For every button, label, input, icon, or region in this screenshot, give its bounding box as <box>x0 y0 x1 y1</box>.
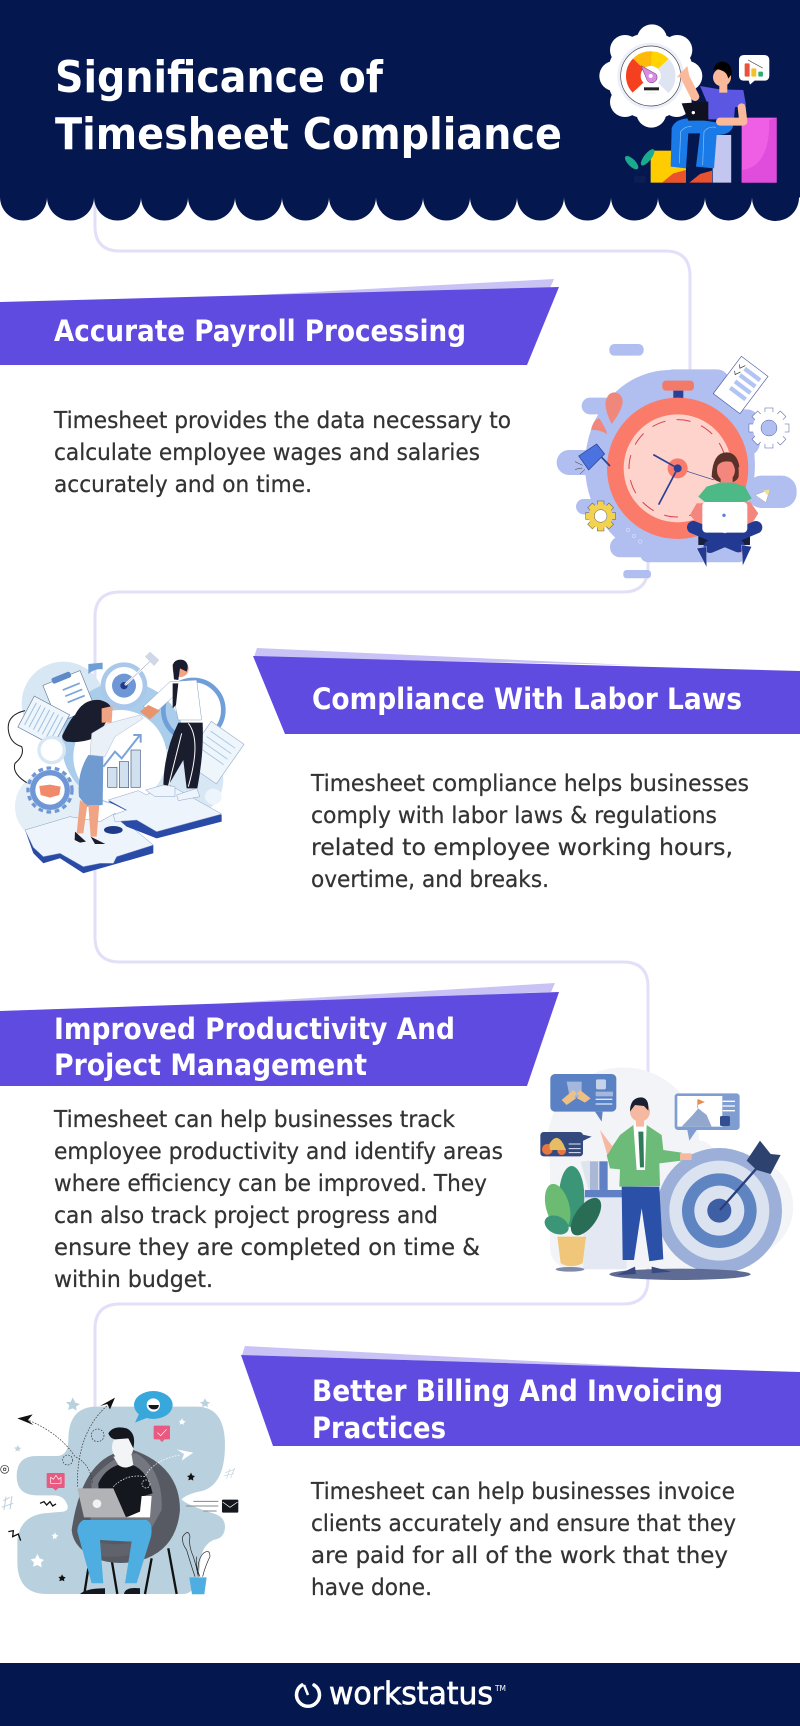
gauge dial <box>617 43 684 109</box>
text: labor laws paragraph: related to employee working hours, <box>311 833 733 861</box>
text: billing paragraph: clients accurately and ensure that they <box>311 1509 736 1537</box>
chart bubble <box>739 55 769 85</box>
illustration: man with target <box>540 1067 793 1280</box>
title: Significance of <box>55 52 384 103</box>
shadow <box>609 1269 751 1280</box>
text: productivity paragraph: Timesheet can help businesses track <box>53 1105 455 1133</box>
banner: billing <box>241 1346 800 1446</box>
plant <box>540 1166 607 1272</box>
puzzle pieces <box>25 783 222 873</box>
banner: labor laws <box>253 648 800 734</box>
text: billing paragraph: have done. <box>311 1573 432 1601</box>
text: payroll paragraph: Timesheet provides the data necessary to <box>53 406 511 434</box>
text: labor laws paragraph: overtime, and breaks. <box>311 865 549 893</box>
banner: productivity <box>0 983 559 1086</box>
heading: Better Billing And Invoicing <box>312 1374 723 1408</box>
stars and marks <box>1 1397 235 1581</box>
plant <box>182 1532 210 1594</box>
chair <box>72 1450 180 1594</box>
icons: red tags <box>47 1426 170 1491</box>
connector path <box>95 200 690 1410</box>
icon: megaphone <box>575 444 610 474</box>
icon: white gear <box>599 24 702 128</box>
bubble: mountain <box>675 1093 740 1141</box>
banner: billing: Practices <box>312 1411 446 1445</box>
text: labor laws paragraph: Timesheet compliance helps businesses <box>310 769 749 797</box>
text: productivity paragraph: ensure they are completed on time & <box>54 1233 480 1261</box>
illustration: man on laptop in chair <box>1 1391 238 1594</box>
bubble: money <box>540 1132 592 1156</box>
text: productivity paragraph <box>53 1105 503 1293</box>
text: billing paragraph <box>310 1477 736 1601</box>
man <box>600 1097 692 1275</box>
background blob <box>547 1067 793 1268</box>
text: productivity paragraph: employee productivity and identify areas <box>54 1137 503 1165</box>
footer band <box>0 1663 800 1726</box>
text: payroll paragraph: calculate employee wages and salaries <box>54 438 480 466</box>
heading: Compliance With Labor Laws <box>312 682 742 716</box>
text: productivity paragraph: where efficiency can be improved. They <box>54 1169 487 1197</box>
icon: yellow gear <box>586 501 616 531</box>
icon: envelope <box>186 1500 238 1513</box>
banner: accurate payroll <box>0 279 559 365</box>
icon: paper plane <box>755 489 770 503</box>
gears and wire <box>8 711 72 812</box>
text: payroll paragraph: accurately and on time. <box>54 470 312 498</box>
documents <box>18 663 244 784</box>
header band <box>0 0 800 221</box>
plant <box>623 147 657 183</box>
background blob <box>17 1407 225 1594</box>
heading: Improved Productivity And <box>54 1012 455 1046</box>
target <box>657 1141 782 1273</box>
heading: Accurate Payroll Processing <box>54 314 466 348</box>
background blobs <box>557 344 797 578</box>
text: productivity paragraph: within budget. <box>54 1265 213 1293</box>
icon: white gear <box>749 408 789 448</box>
text: labor laws paragraph <box>310 769 749 893</box>
woman <box>690 452 758 567</box>
icon: checklist <box>713 356 768 414</box>
text: billing paragraph: are paid for all of the work that they <box>311 1541 728 1569</box>
illustration: gauge and man on bars <box>599 24 777 183</box>
speech bubble <box>134 1391 173 1423</box>
target <box>101 652 159 709</box>
text: payroll paragraph <box>53 406 511 498</box>
man <box>140 660 203 801</box>
man <box>77 1427 153 1594</box>
logo: TM <box>494 1684 506 1693</box>
illustration: handshake on puzzle <box>8 652 244 873</box>
illustration: stopwatch and woman <box>557 344 797 578</box>
bubble: trophy <box>550 1074 616 1122</box>
desk and folders <box>581 1161 627 1269</box>
text: labor laws paragraph: comply with labor laws & regulations <box>311 801 717 829</box>
paper planes and dashed trails <box>17 1398 193 1488</box>
bar chart <box>103 735 141 788</box>
title <box>55 52 562 160</box>
text: productivity paragraph: can also track project progress and <box>54 1201 438 1229</box>
woman <box>62 700 143 844</box>
title: Timesheet Compliance <box>55 109 562 160</box>
banner: productivity: Project Management <box>54 1048 367 1082</box>
text: billing paragraph: Timesheet can help businesses invoice <box>310 1477 735 1505</box>
bars <box>651 118 777 183</box>
man <box>662 62 746 183</box>
stopwatch <box>607 381 748 539</box>
laptop <box>77 1488 126 1517</box>
drops <box>591 392 623 434</box>
logo: workstatus <box>329 1676 493 1712</box>
background blobs <box>15 662 223 842</box>
